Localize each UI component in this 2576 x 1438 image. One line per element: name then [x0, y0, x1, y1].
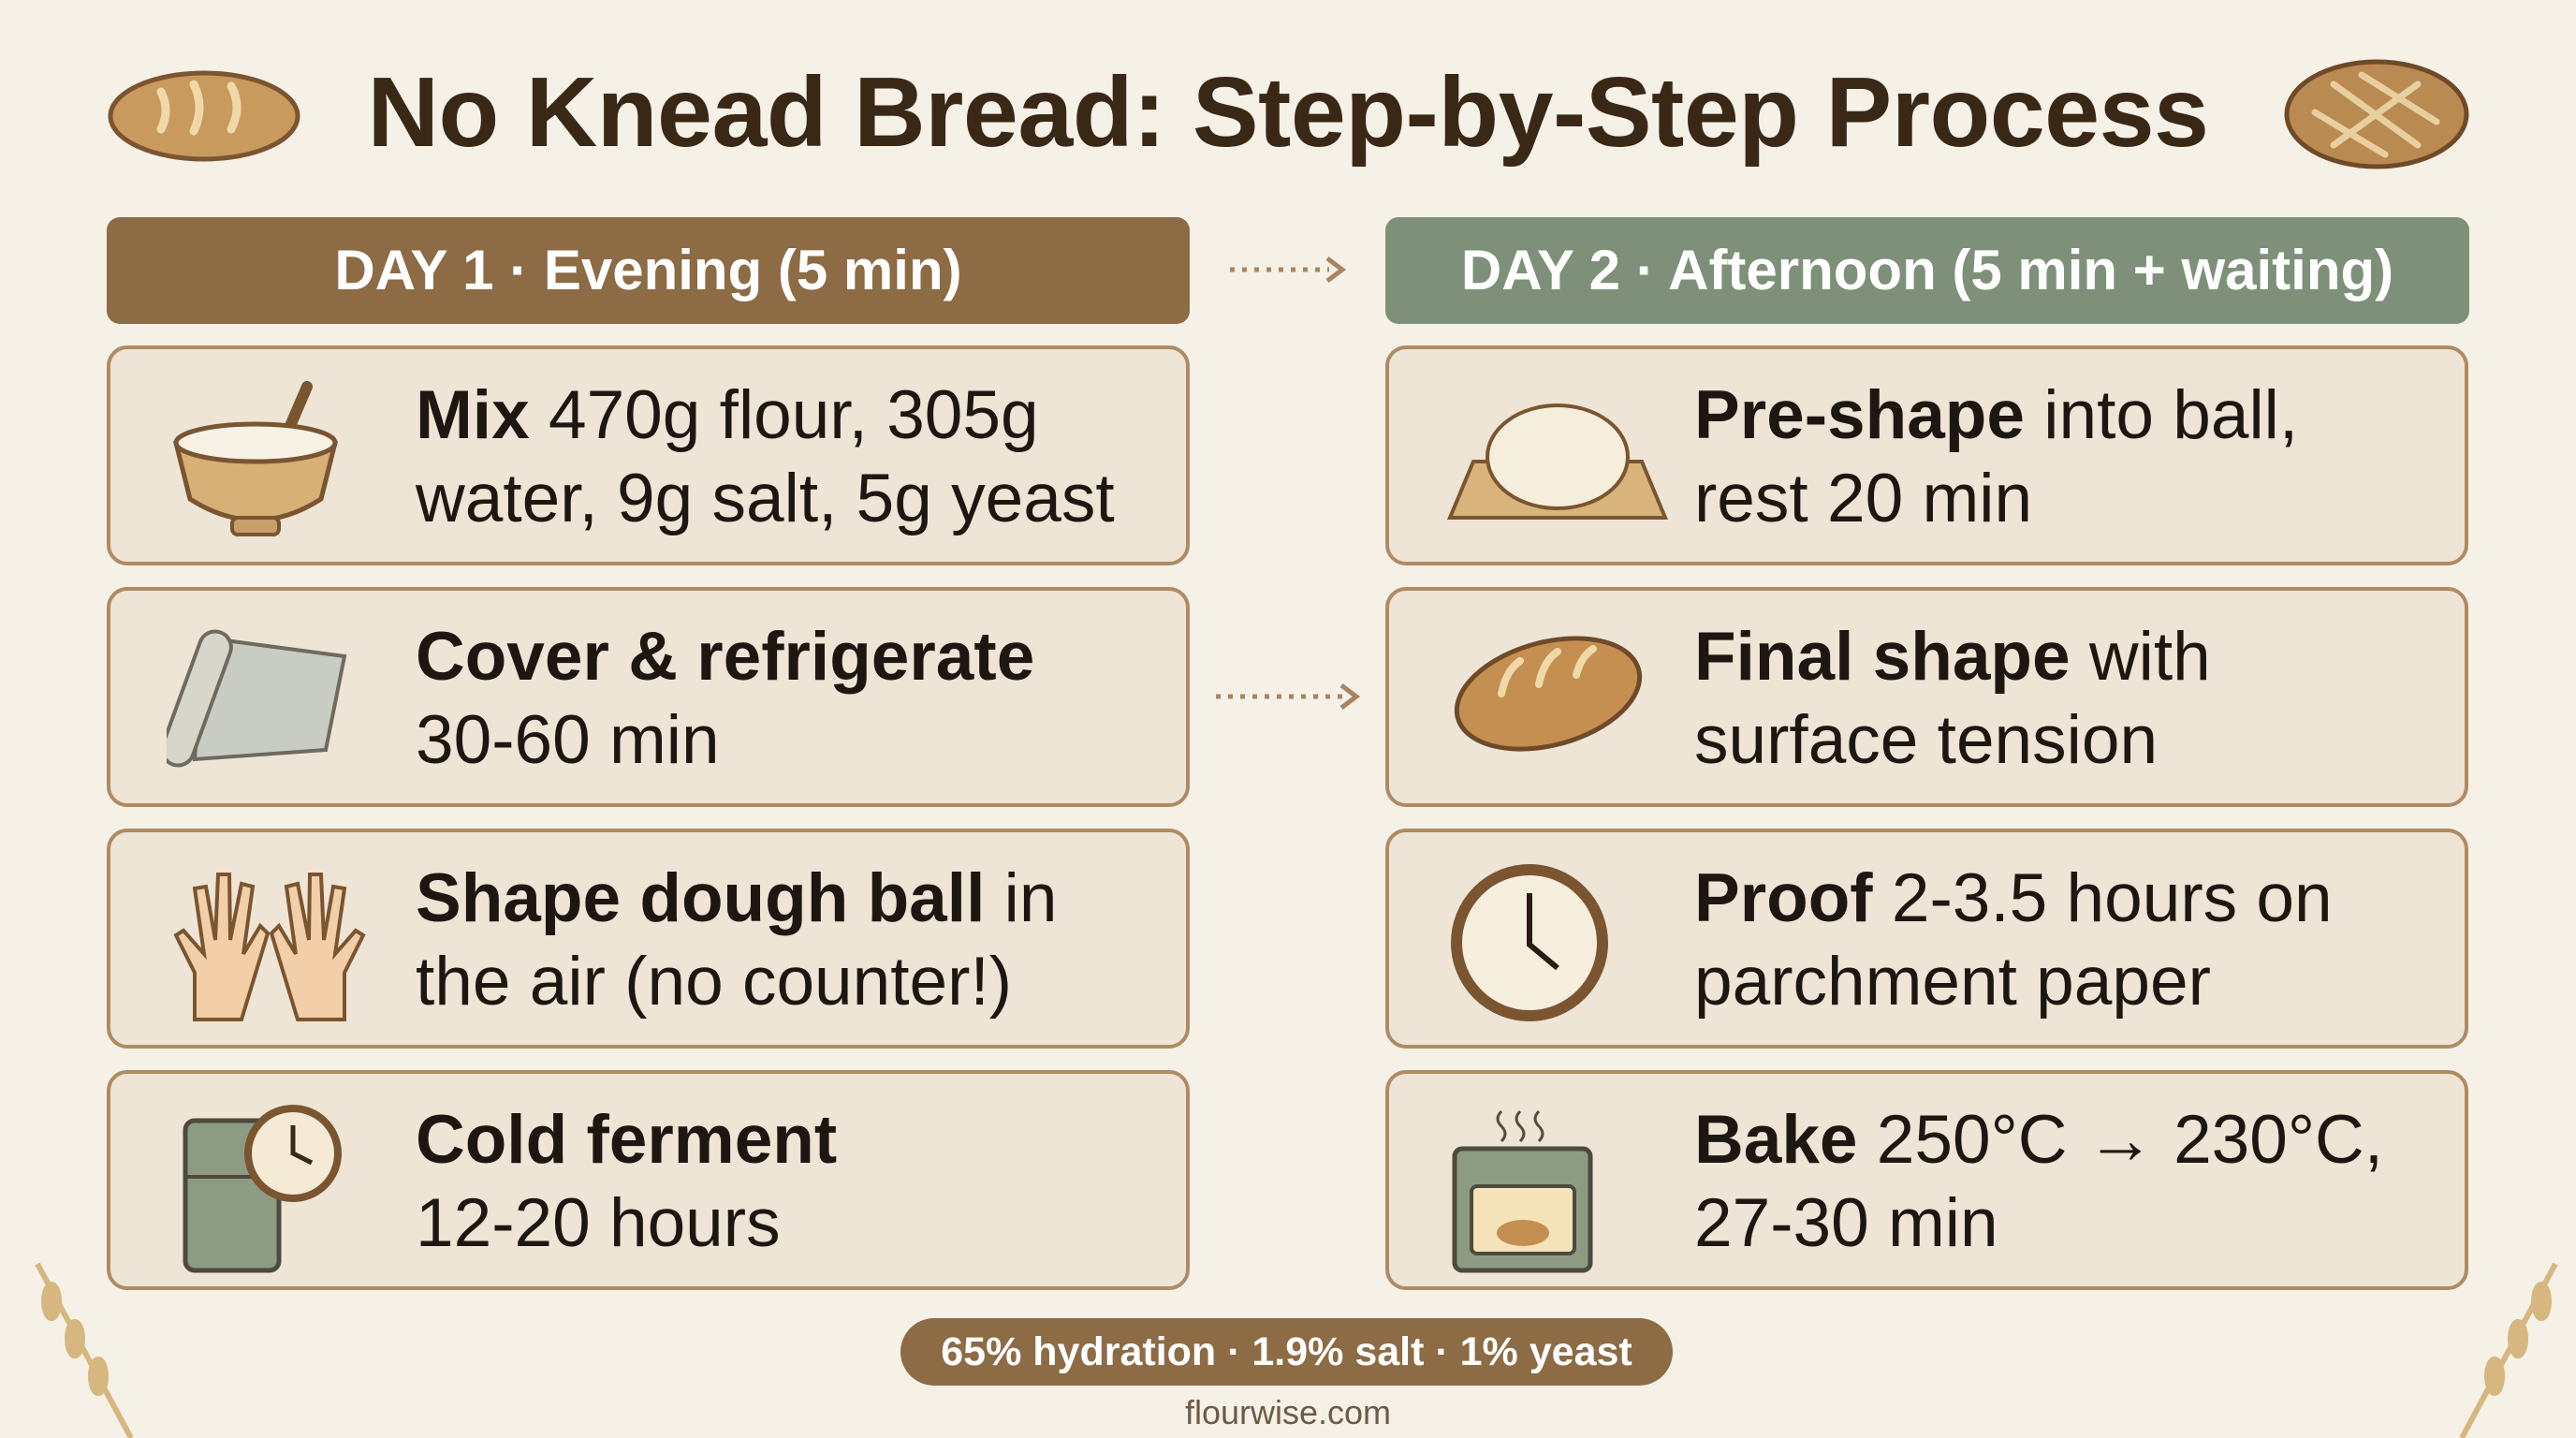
title: No Knead Bread: Step-by-Step Process	[367, 57, 2209, 168]
card: final shape	[1385, 587, 2468, 807]
card: shape	[107, 829, 1190, 1049]
pill: ratios: 65% hydration · 1.9% salt · 1% yeast	[941, 1329, 1632, 1374]
card: bake	[1385, 1070, 2468, 1290]
icon: plastic wrap	[167, 629, 346, 768]
icon: hands	[174, 873, 365, 1021]
icon: round loaf right	[2284, 60, 2469, 169]
card: pre-shape: rest 20 min	[1694, 461, 2032, 536]
header: day 1: DAY 1 · Evening (5 min)	[334, 239, 962, 301]
card: proof: Proof 2-3.5 hours on	[1694, 860, 2333, 936]
arrow: row connector	[1216, 683, 1360, 710]
card: proof: parchment paper	[1694, 944, 2211, 1020]
card: cold ferment	[107, 1070, 1190, 1290]
card: cover	[107, 587, 1190, 807]
footer: website: flourwise.com	[1185, 1393, 1391, 1431]
card: mix: Mix 470g flour, 305g	[416, 377, 1039, 453]
header: day 1	[107, 217, 1190, 324]
icon: oven	[1453, 1110, 1593, 1273]
card: cover: 30-60 min	[416, 702, 720, 778]
card: bake: 27-30 min	[1694, 1185, 1998, 1261]
arrow: header connector	[1230, 257, 1346, 283]
pill: ratios	[900, 1318, 1673, 1386]
card: pre-shape: Pre-shape into ball,	[1694, 377, 2298, 453]
icon: fridge clock	[183, 1105, 342, 1273]
card: mix: water, 9g salt, 5g yeast	[416, 461, 1115, 536]
card: mix	[107, 345, 1190, 565]
icon: wheat right	[2459, 1262, 2557, 1438]
card: final shape: surface tension	[1694, 702, 2158, 778]
card: final shape: Final shape with	[1694, 619, 2211, 695]
card: proof	[1385, 829, 2468, 1049]
icon: dough on board	[1447, 404, 1668, 520]
icon: bowl	[173, 381, 338, 536]
header: day 2: DAY 2 · Afternoon (5 min + waiting)	[1461, 239, 2393, 301]
card: cover: Cover & refrigerate	[416, 619, 1034, 695]
icon: loaf	[1455, 636, 1642, 752]
card: pre-shape	[1385, 345, 2468, 565]
card: bake: Bake 250°C → 230°C,	[1694, 1102, 2383, 1178]
header: day 2	[1385, 217, 2469, 324]
card: shape: Shape dough ball in	[416, 860, 1057, 936]
card: shape: the air (no counter!)	[416, 944, 1012, 1020]
icon: clock	[1451, 864, 1608, 1021]
icon: bread loaf left	[109, 71, 300, 161]
card: cold ferment: Cold ferment	[416, 1102, 837, 1178]
card: cold ferment: 12-20 hours	[416, 1185, 781, 1261]
icon: wheat left	[35, 1262, 133, 1438]
